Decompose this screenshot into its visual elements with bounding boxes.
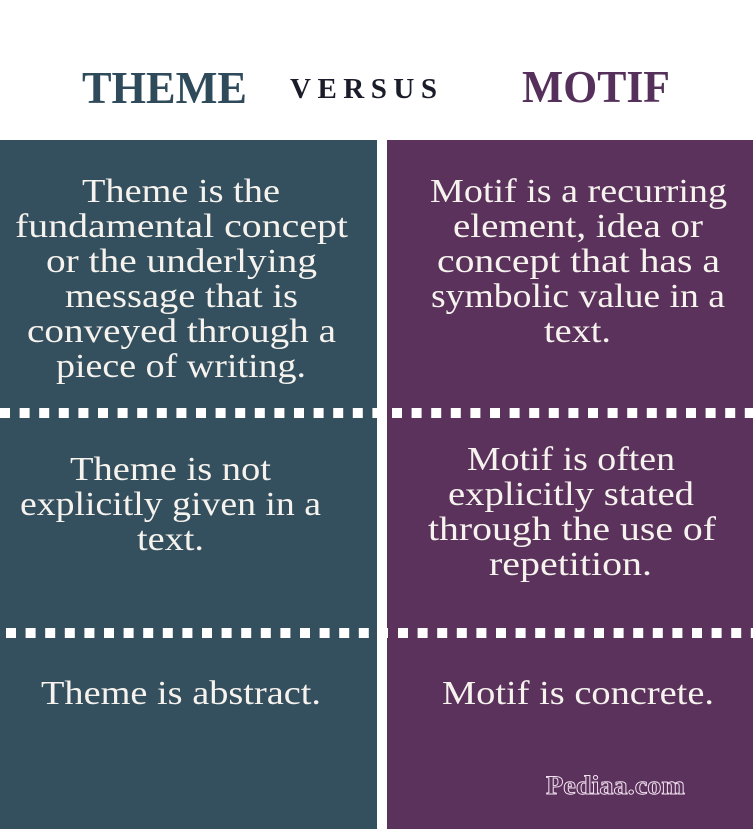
text: motif concrete: Motif is concrete. — [442, 675, 714, 712]
text: motif definition: symbolic value in a — [431, 278, 725, 315]
text: theme abstract: Theme is abstract. — [41, 675, 321, 712]
panel: motif background — [387, 140, 753, 829]
text: motif explicitness — [428, 441, 717, 583]
text: motif definition: text. — [544, 313, 611, 350]
text: theme definition: or the underlying — [46, 243, 317, 280]
text: theme explicitness: Theme is not — [70, 451, 272, 488]
heading: versus: VERSUS — [290, 73, 437, 105]
text: theme definition: fundamental concept — [15, 208, 349, 245]
text: theme explicitness: text. — [137, 521, 204, 558]
text: motif explicitness: Motif is often — [467, 441, 675, 478]
dotted divider: lower — [6, 628, 753, 638]
text: motif explicitness: explicitly stated — [448, 476, 694, 513]
text: theme definition — [15, 173, 349, 385]
text: motif definition: concept that has a — [437, 243, 720, 280]
text: theme definition: Theme is the — [82, 173, 280, 210]
text: motif explicitness: through the use of — [428, 511, 717, 548]
heading: motif: MOTIF — [522, 61, 670, 112]
text: motif definition — [430, 173, 727, 350]
text: theme definition: piece of writing. — [56, 348, 306, 385]
text: theme definition: conveyed through a — [27, 313, 336, 350]
text: theme explicitness: explicitly given in a — [20, 486, 321, 523]
dotted divider: upper — [0, 408, 753, 418]
text: motif explicitness: repetition. — [489, 546, 652, 583]
text: motif definition: Motif is a recurring — [430, 173, 727, 210]
text: theme definition: message that is — [65, 278, 298, 315]
text: theme explicitness — [20, 451, 321, 558]
panel: theme background — [0, 140, 377, 829]
heading: theme: THEME — [82, 62, 247, 113]
logo: Pediaa.com: Pediaa.com — [546, 771, 685, 800]
text: motif definition: element, idea or — [453, 208, 704, 245]
